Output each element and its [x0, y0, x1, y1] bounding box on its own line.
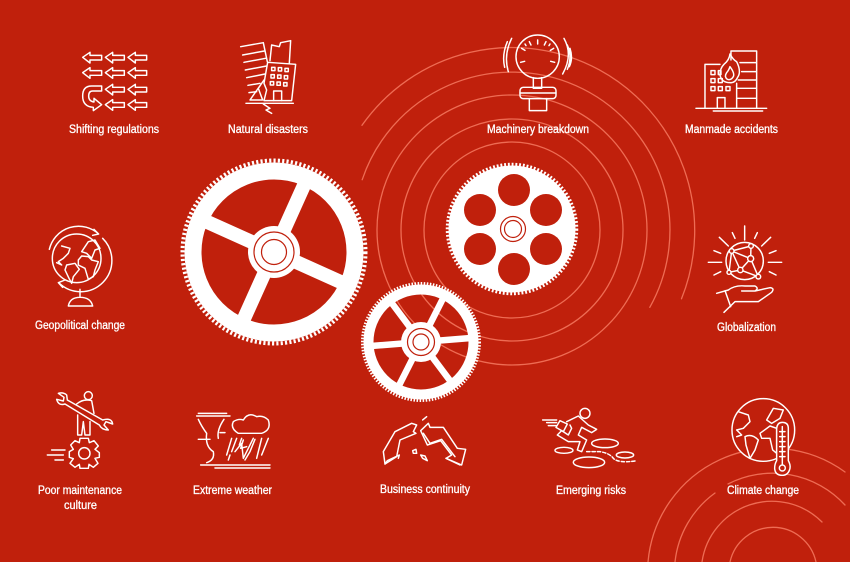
icon: natural disasters buildings	[241, 41, 296, 113]
small gear	[362, 284, 480, 400]
label: Machinery breakdown: Machinery breakdown	[487, 124, 589, 136]
label: Geopolitical change: Geopolitical change	[35, 320, 125, 332]
icon: shifting regulations arrows	[83, 52, 147, 111]
icon: emerging risks runner	[543, 408, 635, 468]
medium gear	[448, 164, 576, 294]
label: Shifting regulations: Shifting regulations	[69, 124, 159, 136]
label: Extreme weather: Extreme weather	[193, 485, 272, 497]
concentric arcs bottom right	[648, 448, 845, 562]
label: Emerging risks: Emerging risks	[556, 485, 626, 497]
icon: extreme weather tornado and storm	[197, 413, 270, 468]
icon: machinery gauge	[504, 35, 572, 111]
concentric arcs behind gears	[362, 48, 695, 365]
icon: globalization hand and network	[708, 226, 782, 312]
icon: manmade accidents burning building	[696, 51, 767, 111]
icon: poor maintenance wrench and gear	[47, 392, 113, 468]
label: Manmade accidents: Manmade accidents	[685, 124, 778, 136]
label: Business continuity: Business continuity	[380, 484, 470, 496]
label: Natural disasters: Natural disasters	[228, 124, 308, 136]
label: Poor maintenance culture: Poor maintenance	[38, 485, 122, 497]
large gear	[182, 160, 366, 344]
label: Globalization: Globalization	[717, 322, 776, 334]
label: Poor maintenance culture: culture	[64, 500, 97, 512]
icon: business continuity broken arrow	[383, 417, 466, 465]
icon: geopolitical globe	[49, 226, 112, 306]
label: Poor maintenance culture	[38, 485, 122, 512]
label: Climate change: Climate change	[727, 485, 799, 497]
icon: climate change globe and thermometer	[732, 399, 795, 475]
